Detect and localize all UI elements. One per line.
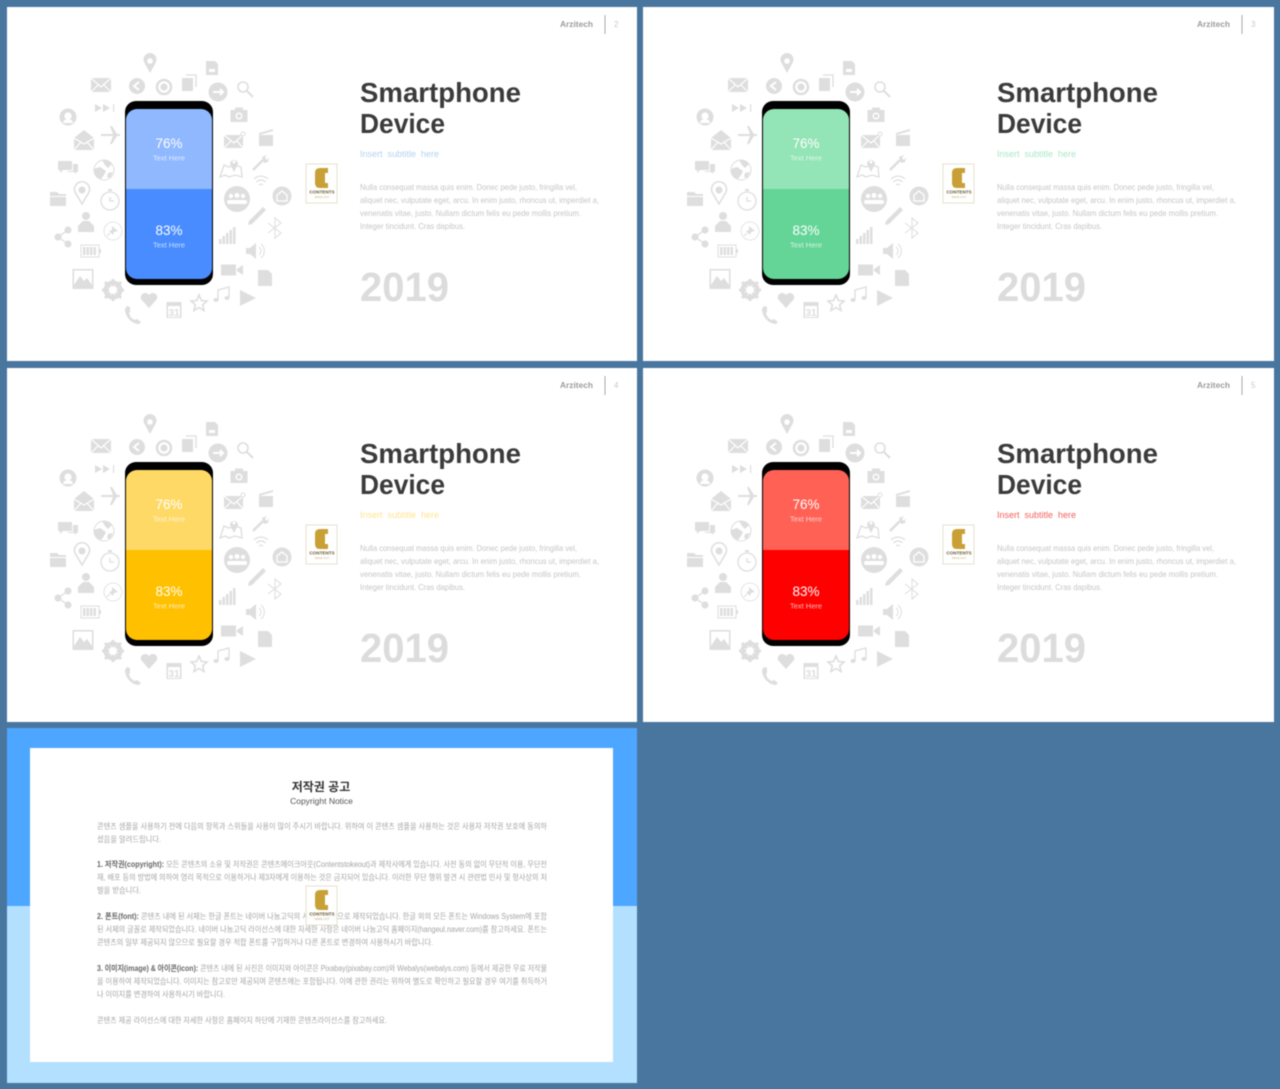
- header: brand and page number: 4: [614, 381, 619, 390]
- subtitle: Insert subtitle here: [997, 149, 1076, 159]
- title: [360, 77, 521, 139]
- phone chart: green: Text Here: [790, 240, 822, 250]
- clause 3: image and icon: 나 이미지를 변경하여 사용하시기 바랍니다.: [97, 989, 225, 999]
- clause 2: font: 콘텐츠의 일부 제공되지 않으므로 필요할 경우 적합 폰트를 구입하거나 다른 폰트로 변경하여 사용하시기 바랍니다.: [97, 937, 433, 947]
- header: brand and page number: [560, 376, 619, 395]
- icon cluster: app icons: [687, 53, 928, 324]
- header: brand and page number: 2: [614, 20, 619, 29]
- watermark logo: MAKE OUT: [315, 195, 330, 199]
- closing line: 콘텐츠 제공 라이선스에 대한 자세한 사항은 홈페이지 하단에 기재한 콘텐츠라이선스를 참고하세요.: [97, 1015, 387, 1025]
- header: brand and page number: 3: [1251, 20, 1256, 29]
- body text: [360, 543, 599, 592]
- phone chart: yellow: Text Here: [153, 514, 185, 524]
- phone chart: green: Text Here: [790, 154, 822, 162]
- year: 2019: [997, 264, 1086, 310]
- header: brand and page number: 5: [1251, 381, 1256, 390]
- phone chart: blue: [125, 101, 213, 285]
- panel: green slide: [643, 7, 1274, 361]
- body text: Integer tincidunt. Cras dapibus.: [997, 221, 1102, 231]
- phone chart: blue: 76%: [155, 136, 183, 151]
- phone chart: red: Text Here: [790, 602, 822, 610]
- body text: [997, 543, 1236, 592]
- year: 2019: [997, 625, 1086, 671]
- title: Smartphone: [360, 77, 521, 108]
- notice heading: Copyright Notice: [290, 796, 353, 806]
- panel: blue slide: [7, 7, 637, 361]
- watermark logo: MAKE OUT: [315, 917, 330, 921]
- title: Device: [360, 108, 445, 139]
- icon cluster: app icons: [50, 414, 292, 685]
- body text: venenatis vitae, justo. Nullam dictum felis eu pede mollis pretium.: [997, 208, 1218, 218]
- clause 1: copyright: 벌을 받습니다.: [97, 885, 141, 895]
- body text: Nulla consequat massa quis enim. Donec pede justo, fringilla vel,: [997, 543, 1214, 553]
- watermark logo: [306, 164, 337, 203]
- body text: venenatis vitae, justo. Nullam dictum felis eu pede mollis pretium.: [360, 208, 581, 218]
- body text: venenatis vitae, justo. Nullam dictum felis eu pede mollis pretium.: [360, 569, 581, 579]
- body text: [997, 182, 1236, 231]
- body text: venenatis vitae, justo. Nullam dictum felis eu pede mollis pretium.: [997, 569, 1218, 579]
- clause 3: image and icon: 을 이용하여 제작되었습니다. 이미지는 참고로만 제공되며 콘텐츠에는 포함됩니다. 이에 관한 권리는 위하여 별도로 확인하고 필요할 경우 여기를 취득하거: [97, 976, 547, 986]
- panel: copyright notice: [7, 728, 637, 1083]
- header: brand and page number: Arzitech: [560, 381, 593, 390]
- body text: aliquet nec, vulputate eget, arcu. In enim justo, rhoncus ut, imperdiet a,: [360, 195, 599, 205]
- header: brand and page number: Arzitech: [1197, 381, 1230, 390]
- phone chart: blue: Text Here: [153, 240, 185, 250]
- phone chart: yellow: [125, 462, 213, 646]
- title: Device: [360, 469, 445, 500]
- watermark logo: [306, 525, 337, 564]
- phone chart: red: [762, 462, 850, 646]
- body text: [360, 182, 599, 231]
- phone chart: green: 76%: [792, 136, 820, 151]
- watermark logo: CONTENTS: [946, 550, 972, 556]
- watermark logo: CONTENTS: [309, 912, 335, 916]
- panel: red slide: [643, 368, 1274, 722]
- title: Smartphone: [997, 438, 1158, 469]
- subtitle: Insert subtitle here: [360, 510, 439, 520]
- icon cluster: app icons: [687, 414, 928, 685]
- notice heading: 저작권 공고: [292, 779, 350, 794]
- phone chart: red: Text Here: [790, 514, 822, 524]
- header: brand and page number: [560, 15, 619, 34]
- phone chart: red: 76%: [792, 497, 820, 512]
- header: brand and page number: [1197, 15, 1256, 34]
- header: brand and page number: Arzitech: [560, 20, 593, 29]
- clause 2: font: 된 서체의 글꼴로 제작되었습니다. 네이버 나눔고딕 라이선스에 대한 자세한 사항은 네이버 나눔고딕 홈페이지(hangeul.naver.com)를 참고하세요. 폰트는: [97, 924, 547, 934]
- body text: Integer tincidunt. Cras dapibus.: [997, 582, 1102, 592]
- clause 1: copyright: 1. 저작권(copyright): 모든 콘텐츠의 소유 및 저작권은 콘텐츠메이크아웃(Contentstokeout)과 제작사에게 있습니다. 사전 동의 없이 무단적 이용, 무단전: [97, 859, 547, 869]
- subtitle: Insert subtitle here: [997, 510, 1076, 520]
- body text: Integer tincidunt. Cras dapibus.: [360, 582, 465, 592]
- icon cluster: app icons: [50, 53, 292, 324]
- watermark logo: MAKE OUT: [952, 556, 967, 560]
- phone chart: green: [762, 101, 850, 285]
- title: Smartphone: [997, 77, 1158, 108]
- clause 1: copyright: [97, 859, 547, 895]
- phone chart: blue: Text Here: [153, 154, 185, 162]
- clause 3: image and icon: [97, 963, 547, 999]
- title: [997, 77, 1158, 139]
- phone chart: red: 83%: [792, 584, 820, 599]
- body text: aliquet nec, vulputate eget, arcu. In enim justo, rhoncus ut, imperdiet a,: [997, 556, 1236, 566]
- watermark logo: [943, 525, 974, 564]
- title: Smartphone: [360, 438, 521, 469]
- watermark logo: [943, 164, 974, 203]
- watermark logo: CONTENTS: [309, 550, 335, 556]
- subtitle: Insert subtitle here: [360, 149, 439, 159]
- panel: yellow slide: [7, 368, 637, 722]
- phone chart: blue: 83%: [155, 223, 183, 238]
- clause 3: image and icon: 3. 이미지(image) & 아이콘(icon): 콘텐츠 내에 된 사진은 이미지와 아이콘은 Pixabay(pixabay.com)와 Webalys(webalys.com) 등에서 제공한 무료 저작물: [97, 963, 547, 973]
- title: Device: [997, 108, 1082, 139]
- body text: Nulla consequat massa quis enim. Donec pede justo, fringilla vel,: [997, 182, 1214, 192]
- clause 1: copyright: 재, 배포 등의 방법에 의하여 영리 목적으로 이용하거나 제3자에게 이용하는 것은 금지되어 있습니다. 이러한 무단 행위 발견 시 관련법 민사 및 형사상의 처: [97, 872, 547, 882]
- phone chart: yellow: Text Here: [153, 602, 185, 610]
- watermark logo: MAKE OUT: [315, 556, 330, 560]
- year: 2019: [360, 264, 449, 310]
- clause 2: font: 2. 폰트(font): 콘텐츠 내에 된 서체는 한글 폰트는 네이버 나눔고딕의 서체를 바탕으로 제작되었습니다. 한글 외의 모든 폰트는 Windows System에 포함: [97, 911, 548, 921]
- watermark logo: CONTENTS: [946, 190, 972, 194]
- header: brand and page number: [1197, 376, 1256, 395]
- body text: Integer tincidunt. Cras dapibus.: [360, 221, 465, 231]
- header: brand and page number: Arzitech: [1197, 20, 1230, 29]
- intro paragraph: 콘텐츠 샘플을 사용하기 전에 다음의 항목과 스위들을 사용이 많이 주시기 바랍니다. 위하여 이 콘텐츠 샘플을 사용하는 것은 사용자 저작권 보호에 동의하: [97, 821, 548, 831]
- title: [997, 438, 1158, 500]
- intro paragraph: [97, 821, 548, 844]
- watermark logo: CONTENTS: [309, 190, 335, 194]
- clause 2: font: [97, 911, 548, 947]
- body text: aliquet nec, vulputate eget, arcu. In enim justo, rhoncus ut, imperdiet a,: [997, 195, 1236, 205]
- notice heading: [290, 779, 353, 806]
- title: Device: [997, 469, 1082, 500]
- phone chart: yellow: 76%: [155, 497, 183, 512]
- intro paragraph: 셨음을 알려드립니다.: [97, 834, 161, 844]
- watermark logo: MAKE OUT: [952, 195, 967, 199]
- year: 2019: [360, 625, 449, 671]
- phone chart: green: 83%: [792, 223, 820, 238]
- body text: aliquet nec, vulputate eget, arcu. In enim justo, rhoncus ut, imperdiet a,: [360, 556, 599, 566]
- watermark logo: [306, 886, 337, 925]
- title: [360, 438, 521, 500]
- body text: Nulla consequat massa quis enim. Donec pede justo, fringilla vel,: [360, 543, 577, 553]
- body text: Nulla consequat massa quis enim. Donec pede justo, fringilla vel,: [360, 182, 577, 192]
- phone chart: yellow: 83%: [155, 584, 183, 599]
